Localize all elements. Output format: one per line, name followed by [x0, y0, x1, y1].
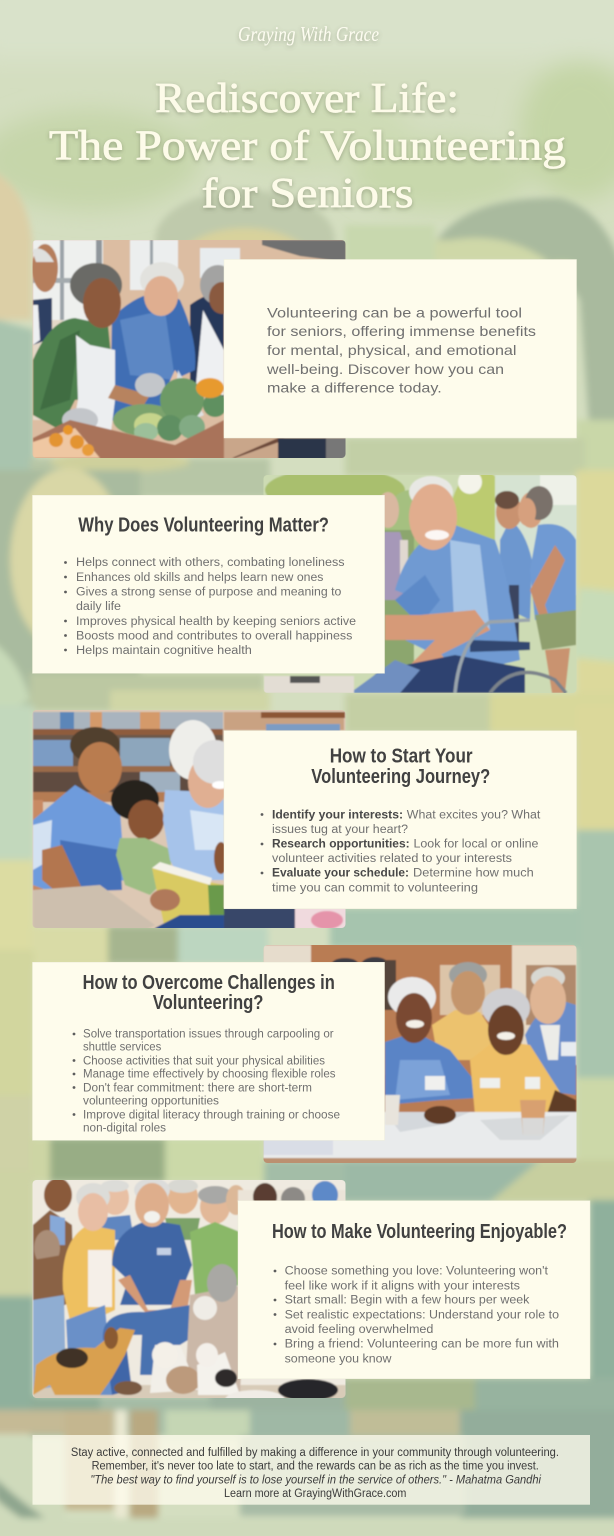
card: intro [224, 260, 576, 438]
title [49, 76, 566, 217]
text block: intro paragraph: Volunteering can be a powerful tool [267, 304, 522, 320]
panel: why volunteering matters [32, 468, 580, 695]
card: why volunteering matters [32, 495, 384, 673]
text block: closing message and quote: Learn more at GrayingWithGrace.com [224, 1488, 406, 1500]
bullet list: Gives a strong sense of purpose and meaning to [76, 586, 341, 598]
panel: closing message [32, 1435, 590, 1505]
bullet list: What excites you? What [407, 809, 541, 821]
bullet list [274, 1266, 559, 1365]
bullet list: Solve transportation issues through carpooling or [83, 1029, 334, 1041]
text block: closing message and quote: Remember, it's never too late to start, and the rewards can be as rich as the time you invest. [92, 1461, 539, 1473]
bullet list: Helps connect with others, combating loneliness [76, 557, 345, 569]
title: The Power of Volunteering [49, 124, 566, 170]
bullet list: Improves physical health by keeping seniors active [76, 616, 356, 628]
bullet list: shuttle services [83, 1041, 162, 1053]
bullet list: Determine how much [413, 868, 534, 880]
bullet list: Don't fear commitment: there are short-term [83, 1082, 312, 1094]
card: making volunteering enjoyable [238, 1201, 590, 1379]
bullet list: Enhances old skills and helps learn new ones [76, 572, 324, 584]
heading: Volunteering Journey? [311, 766, 490, 788]
photo: smiling man in wheelchair [262, 468, 580, 695]
bullet list: Choose activities that suit your physical abilities [83, 1055, 325, 1067]
photo: volunteers with dogs and cats [30, 1178, 348, 1410]
panel: how to start [30, 708, 576, 930]
bullet list: Evaluate your schedule: [272, 868, 409, 880]
bullet list: issues tug at your heart? [272, 824, 408, 836]
bullet list: Improve digital literacy through training or choose [83, 1109, 340, 1121]
heading: Volunteering? [153, 992, 264, 1014]
bullet list: feel like work if it aligns with your interests [285, 1280, 520, 1292]
bullet list: Set realistic expectations: Understand your role to [285, 1309, 559, 1321]
bullet list [261, 809, 541, 894]
text block: intro paragraph [266, 304, 536, 396]
bullet list: Start small: Begin with a few hours per week [285, 1295, 530, 1307]
bullet list: someone you know [285, 1353, 392, 1365]
text block: intro paragraph: for mental, physical, and emotional [267, 342, 516, 358]
photo: seniors sorting vegetables [30, 238, 348, 470]
bullet list: Identify your interests: [272, 809, 403, 821]
logo: Graying With Grace: Graying With Grace [238, 22, 379, 46]
bullet list: avoid feeling overwhelmed [285, 1324, 433, 1336]
heading: Why Does Volunteering Matter? [78, 515, 329, 537]
bullet list: Boosts mood and contributes to overall happiness [76, 630, 353, 642]
bullet list: Helps maintain cognitive health [76, 645, 252, 657]
card: overcoming challenges [32, 962, 384, 1140]
bullet list: non-digital roles [83, 1122, 166, 1134]
panel: making volunteering enjoyable [30, 1178, 590, 1410]
bullet list: time you can commit to volunteering [272, 882, 478, 894]
card: how to start [224, 731, 576, 909]
panel: overcoming challenges [32, 943, 578, 1167]
bullet list: Research opportunities: [272, 839, 410, 851]
bullet list: volunteer activities related to your interests [272, 853, 512, 865]
photo: grandmother reading with children [30, 708, 348, 930]
bullet list: Choose something you love: Volunteering won't [285, 1266, 549, 1278]
card: closing translucent background [32, 1435, 590, 1505]
panel: introduction [30, 238, 576, 470]
bullet list [73, 1029, 340, 1134]
heading: How to Start Your [330, 746, 473, 768]
bullet list: daily life [76, 601, 121, 613]
text block: closing message and quote [71, 1447, 559, 1500]
bullet list: volunteering opportunities [83, 1096, 219, 1108]
text block: intro paragraph: well-being. Discover how you can [266, 361, 504, 377]
text block: intro paragraph: for seniors, offering immense benefits [267, 323, 536, 339]
bullet list: Manage time effectively by choosing flexible roles [83, 1069, 336, 1081]
text block: closing message and quote: Stay active, connected and fulfilled by making a difference in your community through volunteering. [71, 1447, 559, 1459]
text block: closing message and quote: "The best way to find yourself is to lose yourself in the service of others." - Mahatma Gandhi [90, 1474, 541, 1486]
bullet list: Look for local or online [414, 839, 538, 851]
photo: smiling volunteers at a table [262, 943, 578, 1167]
bullet list: Bring a friend: Volunteering can be more fun with [285, 1339, 559, 1351]
title: Rediscover Life: [155, 76, 459, 122]
heading [311, 746, 490, 788]
title: for Seniors [202, 171, 414, 217]
heading: How to Overcome Challenges in [83, 972, 335, 994]
bullet list [64, 557, 356, 657]
text block: intro paragraph: make a difference today. [267, 380, 442, 396]
heading [83, 972, 335, 1014]
